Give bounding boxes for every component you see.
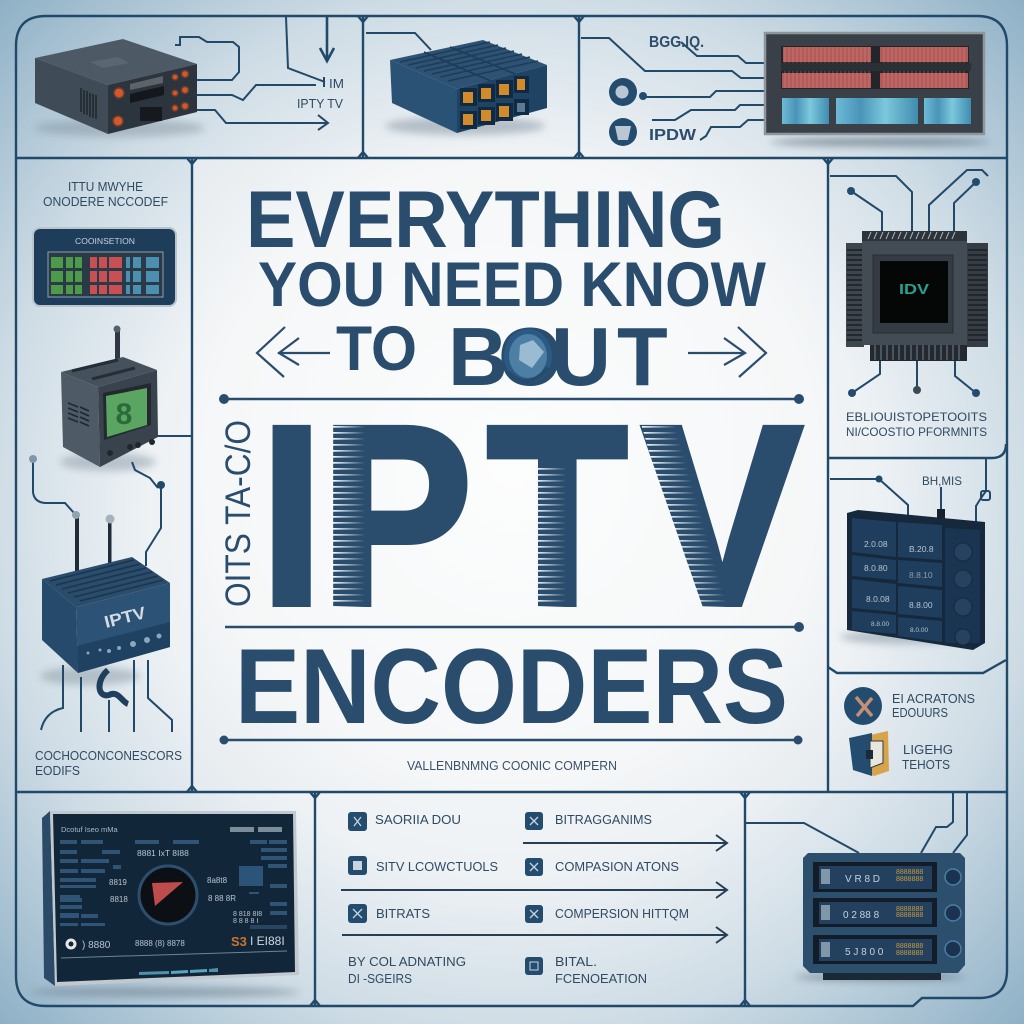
device: grey encoder box [35,39,205,137]
device: panel unit: 8.8.10 [909,570,933,580]
device: blue rack unit [385,40,547,135]
device: server stack: 8888888 [896,906,923,913]
vertical side label: OITS TA-C/O [219,420,258,607]
cables [581,38,765,140]
labels: IM [329,76,344,91]
device: panel unit: 8.0.08 [866,594,890,604]
device: panel unit: 8.8.00 [871,621,889,628]
device: panel unit: 8.8.00 [909,600,933,610]
device: server stack: 8888888 [896,912,923,919]
device: dashboard tablet: 8888 (8) 8878 [135,939,185,948]
device: panel unit [840,510,985,650]
list text: DI -SGEIRS [348,972,412,986]
caption: chip [846,410,987,439]
device: server stack: 0 2 88 8 [843,910,880,921]
list text: BY COL ADNATING [348,955,466,969]
device: server stack: 8888888 [896,876,923,883]
list text: BITAL. [555,955,597,969]
device: chip with screen: IDV [899,281,929,298]
panel: right top chip [830,170,988,439]
device: panel unit: 8.0.80 [864,563,888,573]
title line: BOUT: BOUT [448,310,668,403]
cables around green box [33,436,192,566]
divider: middle [225,622,804,632]
title: IPTV [260,372,802,659]
arrows [341,835,727,943]
device: dashboard tablet: S3 [231,934,247,949]
device: dashboard tablet: 8 8 8 8 I [233,918,258,925]
subtitle: VALLENBNMNG COONIC COMPERN [407,759,617,773]
device: panel unit: 8.0.00 [910,627,928,634]
panel: central title background [193,159,828,792]
label: legend item one: EI ACRATONS [892,692,975,706]
device: server stack: 8888888 [896,943,923,950]
panel: bottom-right server [746,793,967,981]
device: dashboard tablet: ) 8880 [82,940,111,951]
panel: right middle control unit [830,458,990,650]
label: legend item two: TEHOTS [902,758,950,772]
list text: BITRAGGANIMS [555,813,652,827]
caption: left column: COCHOCONCONESCORS [35,748,182,763]
icons: list badges [348,812,543,975]
device: server stack: 5 J 8 0 0 [845,947,884,958]
title: IPTV: V [642,372,802,659]
label: legend item two: LIGEHG [903,743,953,757]
device: server stack: V R 8 D [845,874,880,885]
device: blue IPTV router: IPTV [102,603,148,632]
device: server stack: 8888888 [896,869,923,876]
heading: left column: ONODERE NCCODEF [43,195,168,209]
device: dashboard tablet: Dcotuf Iseo mMa [61,825,119,834]
device: server stack: 8888888 [896,950,923,957]
caption: chip: EBLIOUISTOPETOOITS [846,410,987,424]
divider: upper [219,394,804,404]
device: signal display [765,33,990,146]
device: blue IPTV router [40,511,170,685]
title: IPTV: P [321,374,473,659]
label: legend item two [902,743,953,772]
device: dashboard tablet: 8819 [109,878,127,887]
device: dashboard tablet: 8 88 8R [208,894,236,903]
cables [830,458,990,522]
chart: coloured channel grid: COOINSETION [75,237,135,246]
device: server stack [795,853,965,981]
icon: blue and gold box [849,731,889,776]
title: IPTV: I [260,374,323,659]
device: dashboard tablet: 8a8t8 [207,876,228,885]
icon: circle badge upper [609,78,647,106]
panel: bottom-left dashboard [30,811,300,997]
list text: COMPERSION HITTQM [555,907,689,921]
heading: left column [43,180,168,209]
cables and arrows [175,17,334,130]
panel: top-right display [581,33,990,146]
panel: bottom-middle list [341,812,727,986]
arrow: left [257,327,330,377]
cables [746,793,967,853]
cable [366,33,431,50]
panel: right bottom legend [844,687,975,776]
panel: left column [29,180,192,778]
caption: left column: EODIFS [35,763,80,778]
caption: left column [35,748,182,778]
list text: COMPASION ATONS [555,860,679,874]
panel: top-left encoder [35,17,344,137]
divider: lower [220,736,802,744]
chart: coloured channel grid [33,228,176,306]
title line: ENCODERS: ENCODERS [235,626,788,746]
list text: FCENOEATION [555,972,647,986]
heading: left column: ITTU MWYHE [68,180,143,194]
panel: top-left encoder: IPTY TV [297,96,343,111]
title: IPTV: T [487,373,628,659]
title line: YOU NEED KNOW: YOU NEED KNOW [258,250,766,320]
device: dashboard tablet: 8 818 8I8 [233,911,262,918]
device: panel unit: 2.0.08 [864,539,888,549]
list text [348,813,689,986]
device: dashboard tablet: 8881 IxT 8I88 [137,848,189,858]
arrow: right [688,327,766,377]
panel: top-middle encoder [366,33,547,135]
device: dashboard tablet: I EI88I [250,934,285,948]
cables and nodes [830,170,988,393]
device: panel unit: B.20.8 [909,544,934,554]
title line: EVERYTHING: EVERYTHING [246,175,725,265]
device: green screen monitor box [60,326,158,471]
label: BH,MIS: BH,MIS [922,474,962,488]
label: legend item one: EDOUURS [892,706,948,720]
device: dashboard tablet [30,811,300,997]
device: chip with screen [846,231,988,361]
device: dashboard tablet: 8818 [110,895,128,904]
icon: circle badge lower [609,118,637,146]
icon: lens in letter O [504,329,552,383]
label: legend item one [892,692,975,720]
panel: central title [219,175,804,773]
list text: BITRATS [376,907,430,921]
device: green screen monitor box: 8 [116,398,132,431]
list text: SITV LCOWCTUOLS [376,860,498,874]
caption: chip: NI/COOSTIO PFORMNITS [846,425,987,439]
list text: SAORIIA DOU [375,813,461,827]
label: IPDW: IPDW [649,127,697,144]
cables under router [41,660,172,732]
title line: TO: TO [336,314,417,384]
label: BGG.IQ.: BGG.IQ. [649,34,704,51]
icon: tools badge [844,687,882,725]
